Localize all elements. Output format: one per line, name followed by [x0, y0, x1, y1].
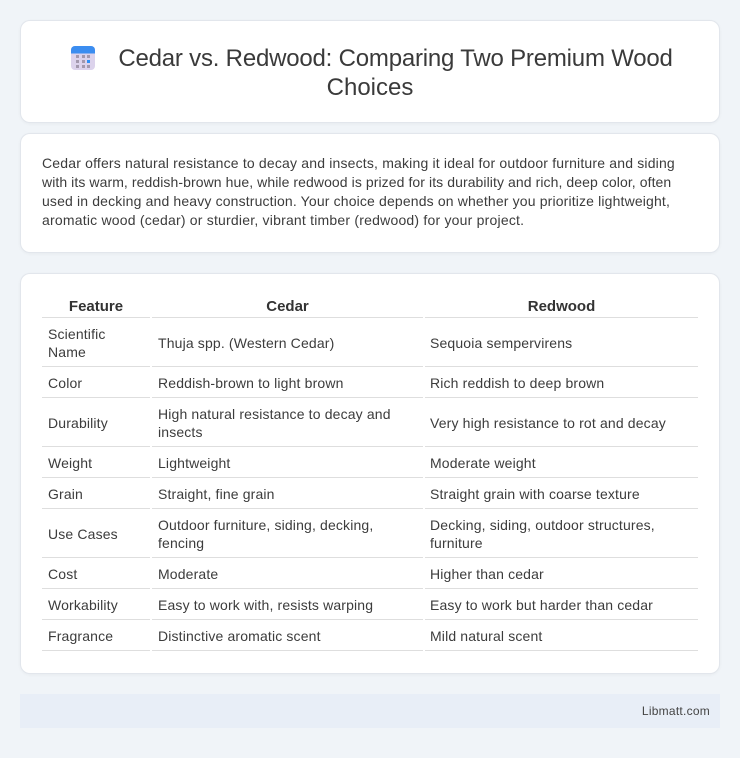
row: durability: Durability — [48, 415, 108, 431]
table header: Feature — [69, 298, 123, 315]
intro text: used in decking and heavy construction. Your choice depends on whether you prioritize lightweight, — [42, 193, 670, 209]
row: fragrance: Mild natural scent — [430, 628, 542, 644]
row: grain: Straight, fine grain — [158, 486, 275, 502]
title — [118, 45, 673, 101]
row: color — [48, 375, 604, 391]
header panel — [20, 20, 720, 123]
row: cost: Cost — [48, 566, 77, 582]
icon: calendar — [71, 46, 95, 70]
row: grain: Straight grain with coarse texture — [430, 486, 640, 502]
row: weight: Weight — [48, 455, 92, 471]
row: use cases: fencing — [158, 535, 204, 551]
row: use cases: Use Cases — [48, 526, 118, 542]
row: durability: High natural resistance to decay and — [158, 406, 391, 422]
title: Choices — [327, 74, 413, 101]
footer text: Libmatt.com — [642, 704, 710, 718]
row: fragrance — [48, 628, 542, 644]
row: grain — [48, 486, 640, 502]
row: workability: Easy to work with, resists warping — [158, 597, 373, 613]
row: weight — [48, 455, 536, 471]
row: cost — [48, 566, 544, 582]
row: weight: Moderate weight — [430, 455, 536, 471]
row: color: Reddish-brown to light brown — [158, 375, 344, 391]
row: color: Color — [48, 375, 82, 391]
row: use cases — [48, 517, 655, 551]
panel: comparison table — [20, 273, 720, 674]
row: durability: insects — [158, 424, 203, 440]
footer bar — [20, 694, 720, 728]
row: weight: Lightweight — [158, 455, 230, 471]
row: durability: Very high resistance to rot and decay — [430, 415, 666, 431]
table header — [69, 298, 595, 315]
row: use cases: Outdoor furniture, siding, decking, — [158, 517, 373, 533]
intro text — [42, 155, 675, 228]
row: color: Rich reddish to deep brown — [430, 375, 604, 391]
row: use cases: furniture — [430, 535, 483, 551]
intro text: Cedar offers natural resistance to decay and insects, making it ideal for outdoor furniture and siding — [42, 155, 675, 171]
row: scientific name: Thuja spp. (Western Cedar) — [158, 335, 334, 351]
intro text: aromatic wood (cedar) or sturdier, vibrant timber (redwood) for your project. — [42, 212, 524, 228]
row: use cases: Decking, siding, outdoor structures, — [430, 517, 655, 533]
intro panel — [20, 133, 720, 253]
intro text: with its warm, reddish-brown hue, while redwood is prized for its durability and rich, deep color, often — [42, 174, 671, 190]
row: workability: Workability — [48, 597, 118, 613]
table header: Redwood — [528, 298, 595, 315]
row: grain: Grain — [48, 486, 83, 502]
row: scientific name: Name — [48, 344, 86, 360]
row: scientific name — [48, 326, 572, 360]
row: fragrance: Fragrance — [48, 628, 113, 644]
row: workability: Easy to work but harder than cedar — [430, 597, 653, 613]
row: workability — [48, 597, 653, 613]
title: Cedar vs. Redwood: Comparing Two Premium Wood — [118, 45, 673, 72]
row: scientific name: Sequoia sempervirens — [430, 335, 572, 351]
row: cost: Higher than cedar — [430, 566, 544, 582]
table header: Cedar — [266, 298, 309, 315]
row: durability — [48, 406, 666, 440]
row: cost: Moderate — [158, 566, 218, 582]
row: scientific name: Scientific — [48, 326, 106, 342]
row: fragrance: Distinctive aromatic scent — [158, 628, 321, 644]
